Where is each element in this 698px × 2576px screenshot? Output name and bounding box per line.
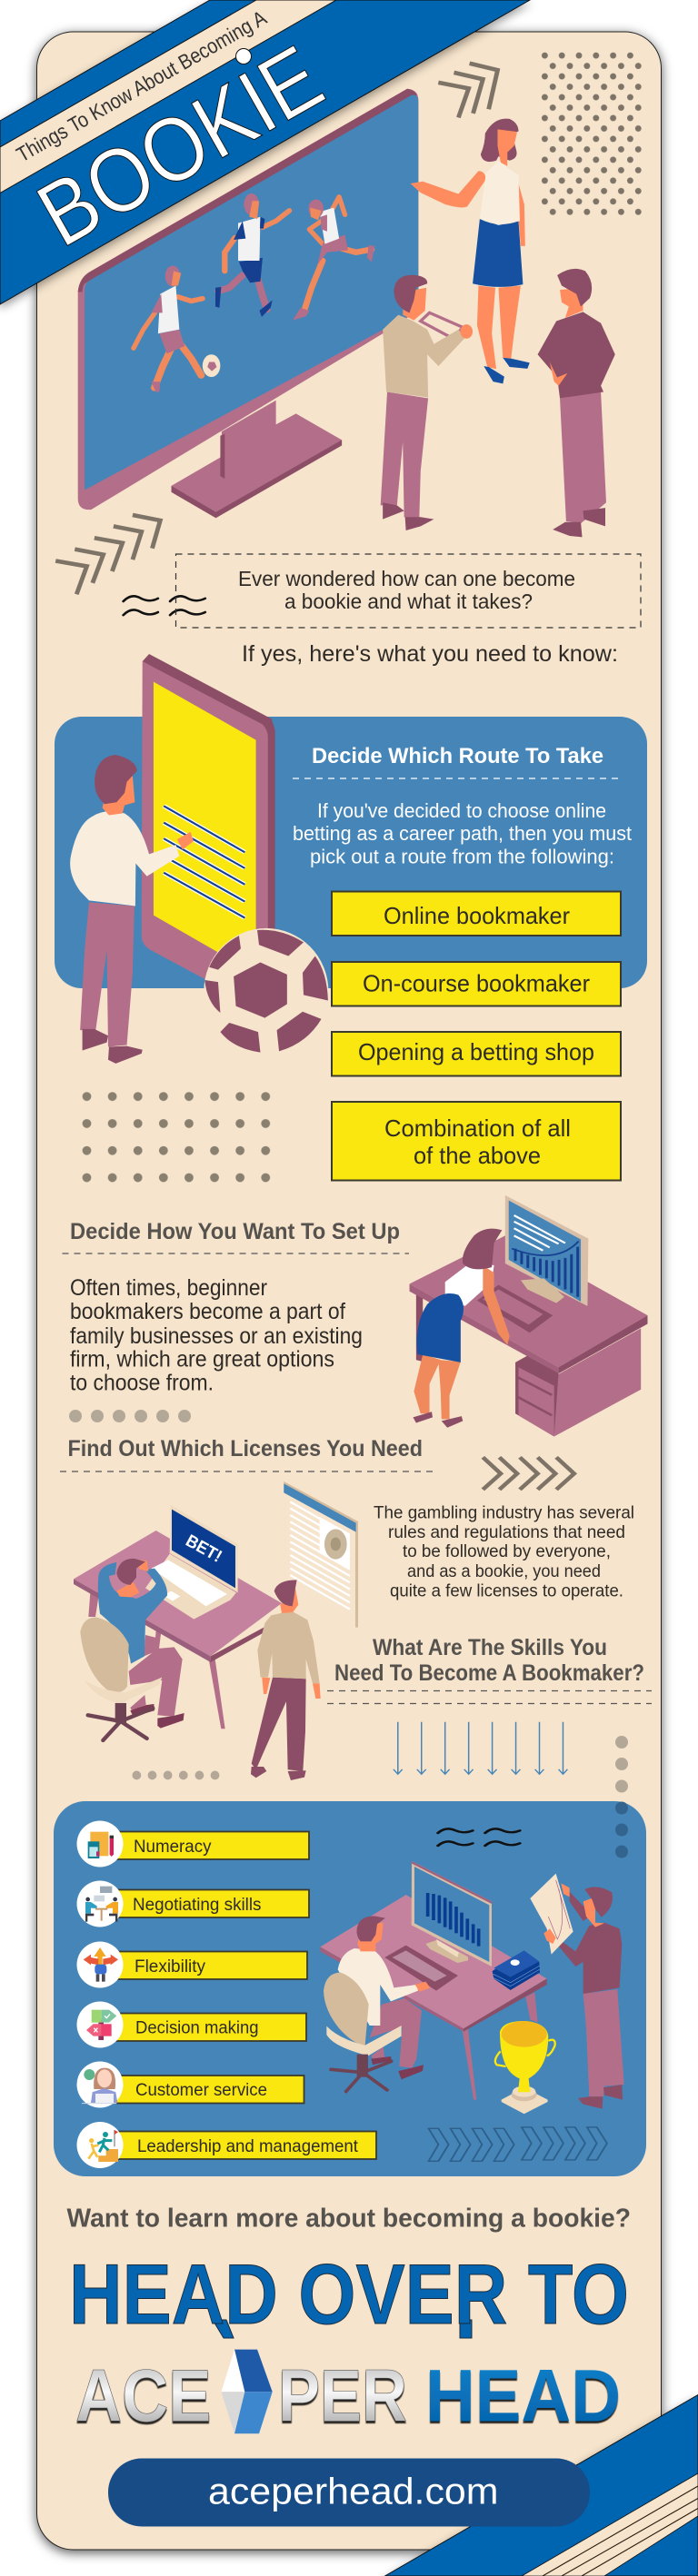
chevrons on panel xyxy=(429,2127,607,2161)
laptop desk xyxy=(74,1505,282,1729)
waves and chevrons on skills panel xyxy=(429,1828,607,2161)
monitor xyxy=(78,89,418,518)
set up text: firm, which are great options xyxy=(70,1346,334,1372)
licenses text: The gambling industry has several xyxy=(374,1502,634,1522)
ace per head logo xyxy=(75,2350,621,2438)
option: betting shop xyxy=(332,1032,621,1075)
top ribbon xyxy=(0,0,530,304)
route text: pick out a route from the following: xyxy=(310,845,614,868)
player kicking ball xyxy=(134,265,220,392)
route heading: Decide Which Route To Take xyxy=(312,744,603,768)
skills icon circles xyxy=(76,1820,124,2168)
ace per head logo: PER xyxy=(278,2354,407,2438)
player running with navy shorts xyxy=(215,193,289,317)
panel: route blue background xyxy=(55,717,647,988)
chevrons lower xyxy=(55,515,160,594)
lead-in line: If yes, here's what you need to know: xyxy=(242,641,618,667)
icon: flexibility xyxy=(84,1947,118,1982)
route text: If you've decided to choose online xyxy=(317,799,606,822)
trophy xyxy=(495,2021,555,2114)
set up text: bookmakers become a part of xyxy=(70,1299,345,1324)
intro text: Ever wondered how can one become xyxy=(238,567,575,590)
option: combination: Combination of all xyxy=(384,1115,571,1142)
vertical dots on panel xyxy=(615,1802,628,1858)
heading: skills xyxy=(334,1635,644,1686)
ace per head logo: HEAD xyxy=(425,2354,621,2438)
BET! laptop text: BET! xyxy=(183,1531,224,1567)
phone xyxy=(142,654,275,984)
chevrons top xyxy=(438,64,497,117)
icon: leadership xyxy=(86,2130,118,2162)
office desk xyxy=(320,1895,547,2100)
option: online bookmaker xyxy=(332,892,621,936)
website pill: aceperhead.com xyxy=(208,2471,498,2512)
down arrows xyxy=(394,1722,567,1774)
option: on-course bookmaker: On-course bookmaker xyxy=(363,970,590,997)
licenses text: to be followed by everyone, xyxy=(403,1541,611,1561)
licenses text: quite a few licenses to operate. xyxy=(390,1580,623,1600)
money stack xyxy=(493,1950,540,1990)
worried seated man xyxy=(80,1559,184,1740)
small dots xyxy=(132,1771,219,1779)
icon: numeracy xyxy=(88,1832,114,1858)
intro dashed box xyxy=(176,554,641,628)
desktop monitor xyxy=(412,1861,492,1967)
seated worker xyxy=(324,1916,430,2092)
skills labels: Leadership and management xyxy=(137,2137,359,2156)
set up text: family businesses or an existing xyxy=(70,1323,363,1349)
licenses text: rules and regulations that need xyxy=(388,1522,625,1542)
heading: skills: Need To Become A Bookmaker? xyxy=(334,1660,644,1686)
keyboard xyxy=(384,1946,458,1991)
skills labels: Customer service xyxy=(135,2081,267,2100)
dot row xyxy=(69,1410,191,1422)
desk and arrows illustrations xyxy=(132,1195,648,1779)
panel: skills blue background xyxy=(54,1801,646,2176)
skills bars xyxy=(116,1831,376,2159)
standing man xyxy=(251,1580,321,1780)
hero illustration xyxy=(55,52,643,615)
skills labels: Flexibility xyxy=(135,1957,205,1977)
skills labels: Numeracy xyxy=(134,1838,212,1857)
analyst with paper xyxy=(530,1874,624,2109)
skill icons xyxy=(82,1832,118,2162)
man with hands on hips xyxy=(538,269,615,537)
desk scene xyxy=(410,1195,648,1437)
skills labels xyxy=(133,1838,359,2156)
office illustration xyxy=(320,1861,624,2114)
bottom right ribbon xyxy=(385,2394,698,2576)
heading: skills: What Are The Skills You xyxy=(373,1635,607,1660)
heading: set up: Decide How You Want To Set Up xyxy=(70,1219,400,1244)
football xyxy=(204,928,328,1055)
title BOOKIE: BOOKIE xyxy=(22,26,339,266)
player sprinting xyxy=(293,197,374,321)
option: combination: of the above xyxy=(414,1142,541,1169)
heading: licenses: Find Out Which Licenses You Need xyxy=(67,1436,423,1461)
icon: decision xyxy=(86,2010,116,2040)
website pill xyxy=(108,2458,590,2527)
set up text: Often times, beginner xyxy=(70,1275,267,1301)
woman at desk xyxy=(413,1229,510,1428)
intro text: a bookie and what it takes? xyxy=(284,590,533,613)
licenses illustration xyxy=(74,1481,358,1780)
set up text xyxy=(70,1275,363,1395)
dot pattern xyxy=(541,52,643,217)
option: on-course bookmaker xyxy=(332,962,621,1006)
ace per head logo: ACE xyxy=(75,2354,211,2438)
option: online bookmaker: Online bookmaker xyxy=(384,902,570,929)
man at phone xyxy=(70,755,194,1064)
chevrons xyxy=(483,1457,574,1490)
man with tablet xyxy=(381,275,473,530)
set up text: to choose from. xyxy=(70,1370,214,1395)
document xyxy=(284,1481,358,1628)
wave marks xyxy=(438,1828,520,1846)
woman presenting xyxy=(411,119,530,383)
call to action question: Want to learn more about becoming a bookie? xyxy=(67,2204,631,2233)
icon: customer xyxy=(82,2068,117,2104)
skills labels: Decision making xyxy=(135,2018,258,2038)
skills labels: Negotiating skills xyxy=(133,1896,262,1915)
licenses text: and as a bookie, you need xyxy=(407,1561,601,1581)
route text: betting as a career path, then you must xyxy=(293,822,632,845)
vertical dots xyxy=(615,1736,628,1793)
route illustration xyxy=(70,654,328,1192)
licenses text xyxy=(374,1502,634,1600)
dot grid xyxy=(74,1083,279,1192)
wave marks xyxy=(124,596,205,615)
intro text xyxy=(238,567,575,613)
option: combination xyxy=(332,1102,621,1181)
icon: negotiating xyxy=(85,1887,118,1922)
route text xyxy=(293,799,632,868)
option: betting shop: Opening a betting shop xyxy=(358,1038,594,1065)
